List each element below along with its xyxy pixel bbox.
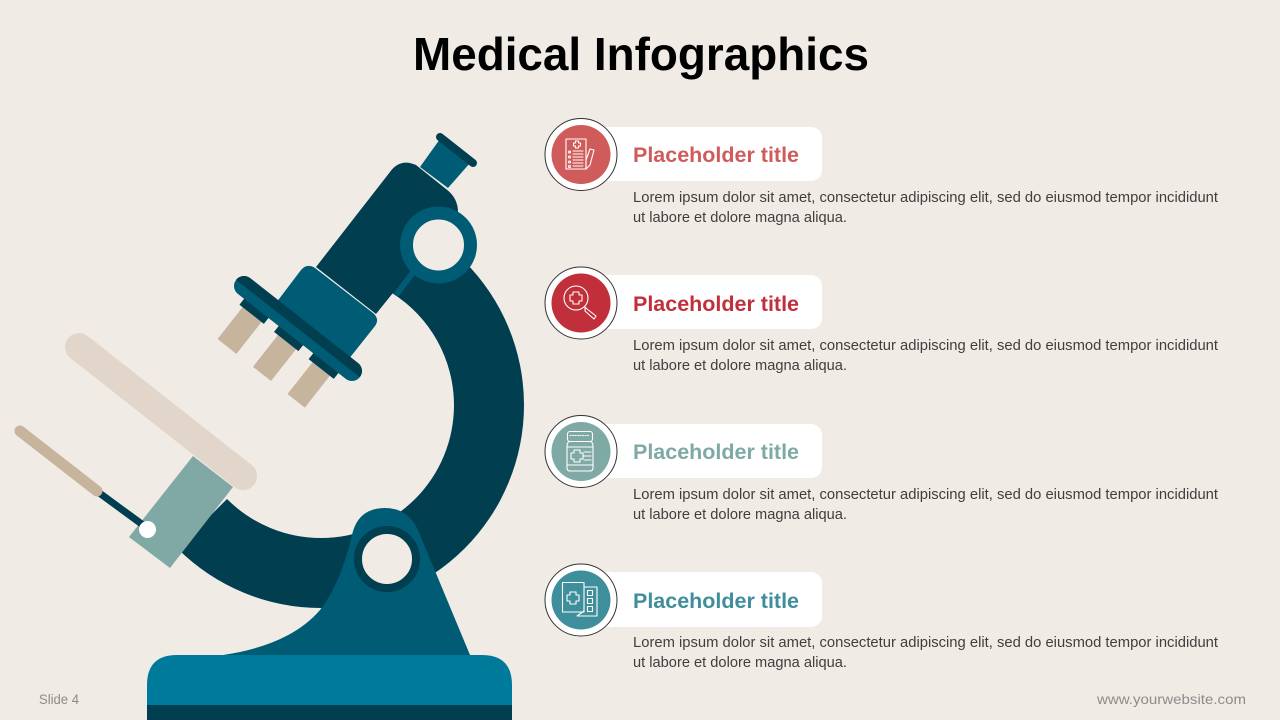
item text [633,635,1218,671]
illustration: microscope [20,137,524,720]
title pill [590,127,822,181]
item text: ut labore et dolore magna aliqua. [633,210,847,226]
footer: website: www.yourwebsite.com [1096,692,1246,707]
title: Medical Infographics [413,28,869,80]
panel: item 4 [545,564,1218,671]
base neck [223,508,470,655]
eyepiece tube [420,139,470,188]
item text: ut labore et dolore magna aliqua. [633,507,847,523]
objective lens 3 [284,352,339,411]
item heading: Placeholder title [633,590,799,613]
item heading: Placeholder title [633,144,799,167]
item text: Lorem ipsum dolor sit amet, consectetur adipiscing elit, sed do eiusmod tempor incididunt [633,190,1218,206]
item heading: Placeholder title [633,293,799,316]
base [147,655,512,720]
title pill [590,275,822,329]
microscope body tube [316,163,458,314]
stage [79,347,243,476]
microscope arm [178,240,524,608]
icon: magnifier with cross [545,267,617,339]
footer: slide number: Slide 4 [39,692,79,707]
title pill [590,424,822,478]
item heading: Placeholder title [633,441,799,464]
focus ring [406,213,470,277]
icon: prescription and pill pack [545,564,617,636]
title pill [590,572,822,627]
item text [633,338,1218,374]
nosepiece plate [230,272,366,385]
nosepiece plate and objective lenses [200,272,366,423]
nosepiece collar [276,266,377,360]
stage arm block [129,456,233,568]
item text: ut labore et dolore magna aliqua. [633,358,847,374]
base pivot ring [358,530,416,588]
item text [633,487,1218,523]
connector to focus ring [396,271,414,295]
objective lens 1 [214,298,269,356]
stage clip rod [20,431,156,538]
icon: medicine jar [545,416,617,488]
panel: item 1 [545,118,1218,226]
eyepiece cap [440,137,473,163]
item text: Lorem ipsum dolor sit amet, consectetur adipiscing elit, sed do eiusmod tempor incididunt [633,487,1218,503]
item text: Lorem ipsum dolor sit amet, consectetur adipiscing elit, sed do eiusmod tempor incididunt [633,635,1218,651]
icon: medical report [545,118,617,190]
panel: item 2 [545,267,1218,374]
panel: item 3 [545,416,1218,523]
item text [633,190,1218,226]
item text: ut labore et dolore magna aliqua. [633,655,847,671]
item text: Lorem ipsum dolor sit amet, consectetur adipiscing elit, sed do eiusmod tempor incididunt [633,338,1218,354]
objective lens 2 [249,325,304,383]
